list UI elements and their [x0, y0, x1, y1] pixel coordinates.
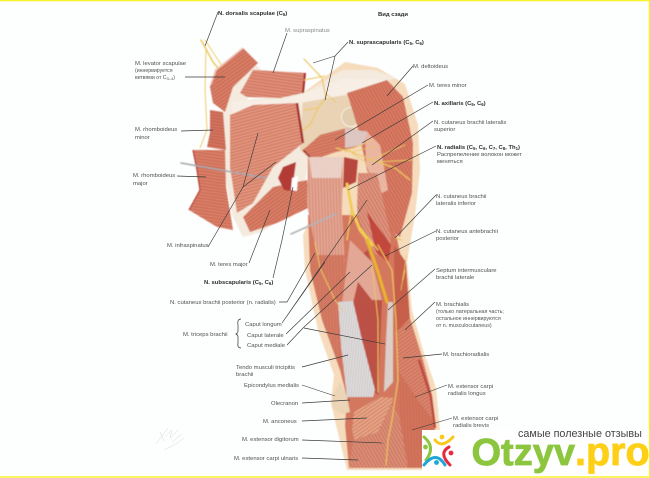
label: n. radialis: , C: [495, 145, 504, 151]
label: n. subscapularis: 6: [269, 281, 272, 286]
label: anconeus: M. anconeus: [263, 419, 297, 425]
label: caput mediale: Caput mediale: [247, 343, 286, 349]
striped septum: [340, 240, 382, 332]
label: brachialis: от n. musculocutaneus): [436, 323, 492, 329]
label: deltoideus: M. deltoideus: [413, 64, 448, 70]
label: n. axillaris: , C: [474, 101, 482, 107]
white opening: [291, 176, 298, 191]
label: levator scapulae: (иннервируется: [135, 68, 173, 74]
label: n. suprascapularis: ): [422, 40, 424, 46]
label: levator scapulae: ): [173, 75, 175, 81]
label: infraspinatus: M. infraspinatus: [167, 243, 209, 249]
label: n. radialis: N. radialis (C: [437, 145, 473, 151]
rhomboideus major: [189, 150, 233, 230]
teres major lateral portion: [343, 157, 358, 188]
scapula bone and spine: [222, 63, 395, 237]
nerves: [200, 40, 412, 465]
heading: view from behind: Вид сзади: [378, 12, 408, 18]
right side tendon: [384, 302, 393, 392]
label: brachialis: (только латеральная часть;: [436, 309, 504, 315]
label: rhomboideus minor: [135, 127, 177, 141]
wordmark: .pro: .pro: [575, 430, 650, 474]
label: septum intermusculare: Septum intermusculare: [436, 268, 497, 274]
label: cutaneus antebrachii posterior: N. cutaneus antebrachii: [436, 229, 498, 235]
label: triceps brachii: M. triceps brachii: [183, 332, 228, 338]
label: n. radialis: Распрепеление волокон может: [437, 152, 522, 158]
label: extensor carpi radialis longus: radialis longus: [448, 391, 486, 397]
label: n. subscapularis: N. subscapularis (C: [204, 280, 259, 286]
label: triceps tendon: Tendo musculi tricipitis: [236, 365, 295, 371]
label: teres major: M. teres major: [210, 262, 248, 268]
label: extensor digitorum: M. extensor digitorum: [242, 437, 299, 443]
label: levator scapulae: [135, 61, 187, 81]
label: n. axillaris: 5: [471, 102, 474, 107]
brachioradialis: [398, 318, 435, 428]
label: septum intermusculare: [436, 268, 497, 281]
label: n. radialis: 7: [493, 146, 496, 151]
label: n. dorsalis scapulae: N. dorsalis scapulae (C: [218, 11, 283, 17]
extensor carpi radialis: [398, 370, 436, 468]
label: rhomboideus major: M. rhomboideus: [133, 173, 175, 179]
label: n. radialis: 5: [473, 146, 476, 151]
label: n. dorsalis scapulae: 5: [283, 12, 286, 17]
humeral head: [342, 108, 360, 126]
label: extensor carpi ulnaris: M. extensor carpi ulnaris: [234, 456, 298, 462]
teres minor: [303, 128, 368, 160]
label: rhomboideus major: [133, 173, 175, 187]
label: levator scapulae: M. levator scapulae: [135, 61, 187, 67]
label: n. axillaris: ): [484, 101, 486, 107]
muscles of the arm (base): [308, 215, 436, 468]
label: brachialis: M. brachialis: [436, 302, 469, 308]
label: n. axillaris: N. axillaris (C: [434, 101, 471, 107]
acromion: [232, 78, 388, 114]
label: rhomboideus major: major: [133, 181, 148, 187]
label: n. radialis: , Th: [505, 145, 516, 151]
triceps lateral head: [357, 173, 391, 263]
triceps long head: [307, 157, 345, 262]
epicondyle and olecranon: [332, 382, 350, 414]
label: levator scapulae: ветвями от C: [135, 75, 167, 81]
label: n. axillaris: 6: [481, 102, 484, 107]
brachialis: [394, 245, 410, 335]
label: n. radialis: , C: [475, 145, 484, 151]
label: brachioradialis: M. brachioradialis: [443, 352, 489, 358]
label: cutaneus brachii lateralis inferior: lateralis inferior: [436, 201, 476, 207]
skin of the arm: [300, 62, 440, 470]
triceps brace: [236, 319, 241, 348]
label: olecranon: Olecranon: [271, 401, 298, 407]
label: extensor carpi radialis brevis: M. extensor carpi: [453, 416, 498, 422]
leader lines: [177, 12, 452, 460]
triceps tendon: [338, 301, 375, 397]
levator scapulae: [210, 48, 258, 112]
retractor probes: [181, 163, 336, 234]
label: n. radialis: ): [518, 145, 520, 151]
label: extensor carpi radialis brevis: [453, 416, 498, 429]
label: brachialis: остальное иннервируются: [436, 316, 501, 322]
joint capsule: [300, 88, 358, 160]
label: n. radialis: 1: [516, 146, 519, 151]
label: extensor carpi radialis longus: M. extensor carpi: [448, 384, 493, 390]
label: supraspinatus: M. supraspinatus: [285, 28, 330, 34]
label: caput longum: Caput longum: [245, 322, 282, 328]
label: cutaneus brachii lateralis superior: N. cutaneus brachii lateralis: [434, 120, 506, 126]
label: cutaneus brachii lateralis superior: superior: [434, 127, 455, 133]
label: n. radialis: , C: [485, 145, 494, 151]
lower arm triceps: [312, 255, 345, 370]
label: teres minor: M. teres minor: [429, 83, 467, 89]
label: n. radialis: [437, 145, 522, 165]
label: triceps tendon: [236, 365, 295, 378]
watermark logo panel: [422, 428, 650, 476]
rhomboideus minor: [207, 110, 226, 150]
logo tagline: самые полезные отзывы: [518, 428, 642, 440]
label: cutaneus brachii lateralis superior: [434, 120, 506, 133]
logo icon: [423, 435, 453, 465]
label: rhomboideus minor: M. rhomboideus: [135, 127, 177, 133]
label: n. suprascapularis: 5: [410, 41, 413, 46]
label: n. suprascapularis: N. suprascapularis (C: [349, 40, 410, 46]
white logo background: [422, 430, 649, 476]
label: cutaneus brachii lateralis inferior: [436, 194, 486, 207]
label: n. suprascapularis: 6: [420, 41, 422, 46]
label: cutaneus antebrachii posterior: [436, 229, 498, 242]
label: cutaneus antebrachii posterior: posterior: [436, 236, 459, 242]
pale deltoid area: [365, 130, 388, 195]
anconeus: [352, 397, 394, 447]
supraspinatus: [240, 70, 305, 98]
wordmark: Otzyv: Otzyv: [472, 432, 575, 474]
label: triceps tendon: brachii: [236, 372, 253, 378]
label: extensor carpi radialis brevis: radialis brevis: [453, 423, 489, 429]
teres major: [243, 180, 310, 232]
anatomical illustration: [181, 40, 440, 470]
label: caput laterale: Caput laterale: [247, 333, 284, 339]
label: cutaneus brachii lateralis inferior: N. cutaneus brachii: [436, 194, 486, 200]
label: septum intermusculare: brachii laterale: [436, 275, 475, 281]
triceps medial dark belly: [350, 250, 382, 395]
label: n. subscapularis: ): [271, 280, 273, 286]
infraspinatus: [230, 103, 303, 213]
deltoid: [347, 80, 413, 237]
label: epicondylus medialis: Epicondylus medialis: [244, 383, 299, 389]
label: n. radialis: 8: [503, 146, 506, 151]
label: brachialis: [436, 302, 504, 329]
logo wordmark: [472, 430, 650, 474]
label: n. radialis: меняться: [437, 159, 463, 165]
forearm extensors: [349, 402, 408, 468]
label: rhomboideus minor: minor: [135, 135, 150, 141]
label: levator scapulae: 3–4: [167, 76, 174, 81]
cut muscle stump: [278, 162, 296, 191]
labels: [133, 11, 522, 462]
label: n. dorsalis scapulae: ): [285, 11, 287, 17]
label: n. suprascapularis: , C: [412, 40, 420, 46]
label: cutaneus brachii posterior: N. cutaneus brachii posterior (n. radialis): [170, 300, 276, 306]
label: n. subscapularis: 5: [259, 281, 262, 286]
artist signature: [156, 428, 184, 450]
label: n. radialis: 6: [483, 146, 486, 151]
label: n. subscapularis: , C: [261, 280, 270, 286]
label: extensor carpi radialis longus: [448, 384, 493, 397]
